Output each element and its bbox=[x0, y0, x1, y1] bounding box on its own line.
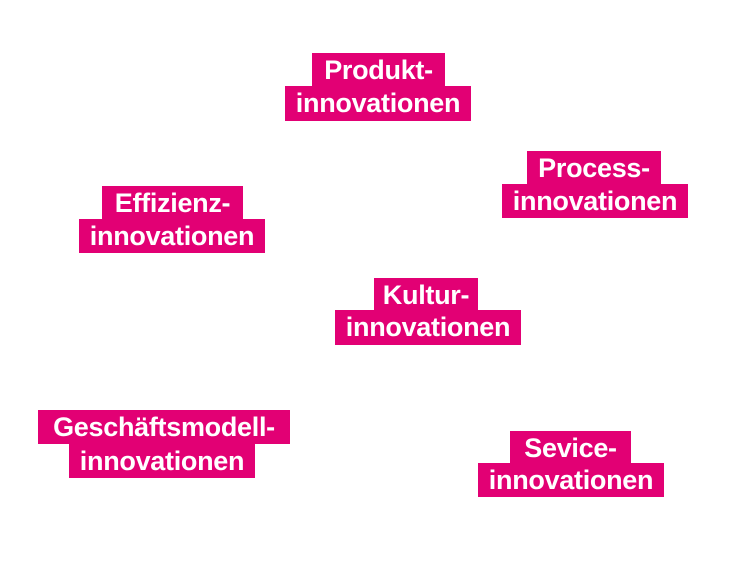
label: Processinnovationen bbox=[502, 151, 688, 218]
label: Kulturinnovationen: Kultur- bbox=[383, 280, 469, 310]
label: Produktinnovationen: innovationen bbox=[296, 88, 460, 118]
label: Processinnovationen: innovationen bbox=[513, 186, 677, 216]
label: Effizienzinnovationen bbox=[79, 186, 265, 253]
label: Geschäftsmodellinnovationen: Geschäftsmodell- bbox=[53, 412, 275, 442]
label: Kulturinnovationen bbox=[335, 278, 521, 345]
label: Effizienzinnovationen: innovationen bbox=[90, 221, 254, 251]
label: Geschäftsmodellinnovationen bbox=[38, 410, 290, 478]
label: Produktinnovationen bbox=[285, 53, 471, 121]
label: Seviceinnovationen: Sevice- bbox=[524, 433, 617, 463]
label: Effizienzinnovationen: Effizienz- bbox=[115, 188, 230, 218]
label: Kulturinnovationen: innovationen bbox=[346, 312, 510, 342]
label: Seviceinnovationen bbox=[478, 431, 664, 497]
label: Seviceinnovationen: innovationen bbox=[489, 465, 653, 495]
label: Processinnovationen: Process- bbox=[538, 153, 650, 183]
label: Geschäftsmodellinnovationen: innovationen bbox=[80, 446, 244, 476]
label: Produktinnovationen: Produkt- bbox=[324, 55, 433, 85]
